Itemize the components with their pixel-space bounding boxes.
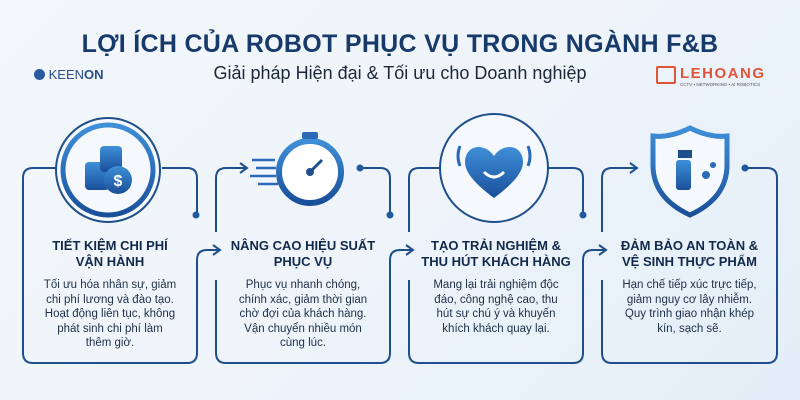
panel 3 text: Mang lại trải nghiệm độc — [433, 279, 559, 291]
icon: coins — [56, 118, 160, 222]
logo: LEHOANG — [656, 65, 766, 87]
panel 4 outline — [602, 168, 777, 363]
panel 1 text: Tối ưu hóa nhân sự, giảm — [44, 279, 176, 291]
icon: coins: $ — [114, 173, 123, 190]
panel 2 outline — [216, 168, 412, 363]
panel 1 text: phát sinh chi phí làm — [57, 322, 163, 334]
arrowheads — [213, 163, 637, 255]
top right connectors — [162, 168, 583, 215]
panel 2 text: cùng lúc. — [280, 337, 326, 349]
logo: KEENON: KEENON — [49, 67, 104, 82]
logo: LEHOANG: LEHOANG — [680, 65, 766, 82]
panel 4 text: ĐẢM BẢO AN TOÀN & — [621, 238, 758, 253]
icon: stopwatch — [250, 132, 341, 203]
panel 3 outline — [409, 168, 605, 363]
panel 1 text: thêm giờ. — [86, 337, 134, 349]
panel 2 text: chính xác, giảm thời gian — [239, 294, 367, 306]
panel 4 text: giảm nguy cơ lây nhiễm. — [627, 294, 752, 306]
panel 2 text: chờ đợi của khách hàng. — [240, 308, 366, 320]
panel 1 text: chi phí lương và đào tạo. — [46, 294, 174, 306]
icon: shield — [653, 128, 727, 215]
panel 3 text: hút sự chú ý và khuyến — [437, 308, 555, 320]
panel 4 text: Hạn chế tiếp xúc trực tiếp, — [622, 279, 757, 291]
logo: LEHOANG: CCTV • NETWORKING • AI ROBOTICS — [680, 82, 760, 87]
panel 1 outline — [23, 168, 219, 363]
panel 4 text — [620, 238, 758, 334]
panel 4 text: Quy trình giao nhận khép — [625, 308, 754, 320]
panel 3 text — [421, 238, 571, 334]
panel 4 text: kín, sạch sẽ. — [657, 322, 722, 334]
panel 3 text: THU HÚT KHÁCH HÀNG — [421, 254, 571, 269]
panel 1 text: Hoạt động liên tục, không — [45, 308, 175, 320]
panel 4 text: VỆ SINH THỰC PHẨM — [622, 254, 757, 269]
panel 3 text: TẠO TRẢI NGHIỆM & — [431, 238, 561, 253]
title: LỢI ÍCH CỦA ROBOT PHỤC VỤ TRONG NGÀNH F&B — [82, 30, 718, 58]
panel 1 text: TIẾT KIỆM CHI PHÍ — [52, 238, 168, 253]
panel 2 text: NÂNG CAO HIỆU SUẤT — [231, 238, 375, 253]
icon: heart — [440, 114, 548, 222]
panel 2 text: Vận chuyển nhiều món — [244, 322, 362, 334]
panel 1 text — [44, 238, 176, 349]
panel 2 text — [231, 238, 376, 349]
panel 2 text: Phục vụ nhanh chóng, — [246, 279, 360, 291]
panel 3 text: đáo, công nghệ cao, thu — [434, 294, 558, 306]
subtitle: Giải pháp Hiện đại & Tối ưu cho Doanh nghiệp — [214, 63, 586, 83]
panel 3 text: khích khách quay lại. — [442, 322, 550, 334]
panel 1 text: VẬN HÀNH — [76, 254, 144, 269]
panel 2 text: PHỤC VỤ — [274, 254, 332, 269]
